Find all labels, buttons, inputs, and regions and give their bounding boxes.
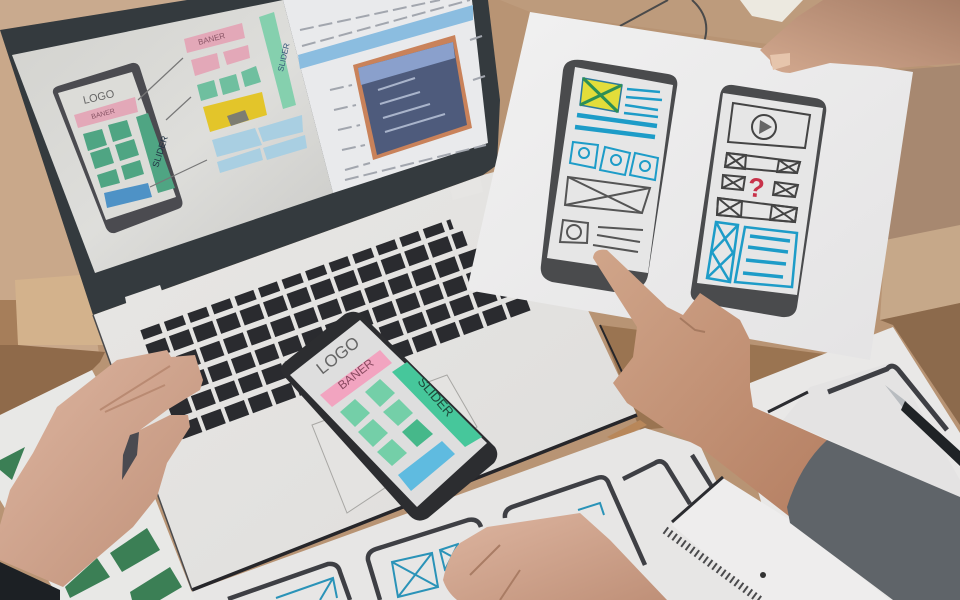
- printed wireframes: [228, 455, 712, 600]
- on-screen phone mockup: [53, 63, 182, 233]
- on-screen exploded components: SLIDER: [276, 42, 291, 72]
- bottom left paper with green tiles: [0, 370, 195, 600]
- trackpad: [312, 375, 477, 513]
- phone lying on laptop: LOGO: [313, 333, 363, 378]
- phone lying on laptop: SLIDER: [415, 374, 457, 419]
- right phone wireframe: [691, 85, 826, 317]
- right hand pointing at paper, with forearm: [593, 250, 827, 517]
- keyboard: [142, 224, 528, 432]
- on-screen exploded components: [184, 12, 307, 173]
- on-screen phone mockup: SLIDER: [150, 134, 170, 169]
- flower and cable behind the paper: [620, 0, 803, 42]
- left phone wireframe: [541, 60, 677, 292]
- laptop base: [93, 165, 637, 590]
- grey sleeve: [787, 440, 960, 600]
- notebook with spiral: [665, 477, 890, 600]
- pen: [885, 385, 960, 466]
- on-screen code lines: [300, 0, 486, 180]
- left hand on keyboard: [0, 350, 203, 600]
- on-screen phone mockup: LOGO: [82, 88, 116, 107]
- on-screen code window: [353, 35, 472, 160]
- paper wireframe sheet: [467, 12, 913, 360]
- right phone wireframe: ?: [746, 172, 766, 204]
- on-screen exploded components: BANER: [197, 31, 226, 47]
- phone lying on laptop: BANER: [335, 356, 377, 392]
- on-screen connector lines: [138, 58, 207, 187]
- bottom hand: [443, 513, 667, 600]
- phone lying on laptop: [281, 312, 497, 521]
- on-screen phone mockup: BANER: [91, 108, 116, 121]
- hand holding the paper, top right: [760, 0, 960, 73]
- desk papers at lower right: [190, 327, 960, 600]
- hinge tabs: [125, 177, 483, 312]
- laptop screen: [0, 0, 500, 315]
